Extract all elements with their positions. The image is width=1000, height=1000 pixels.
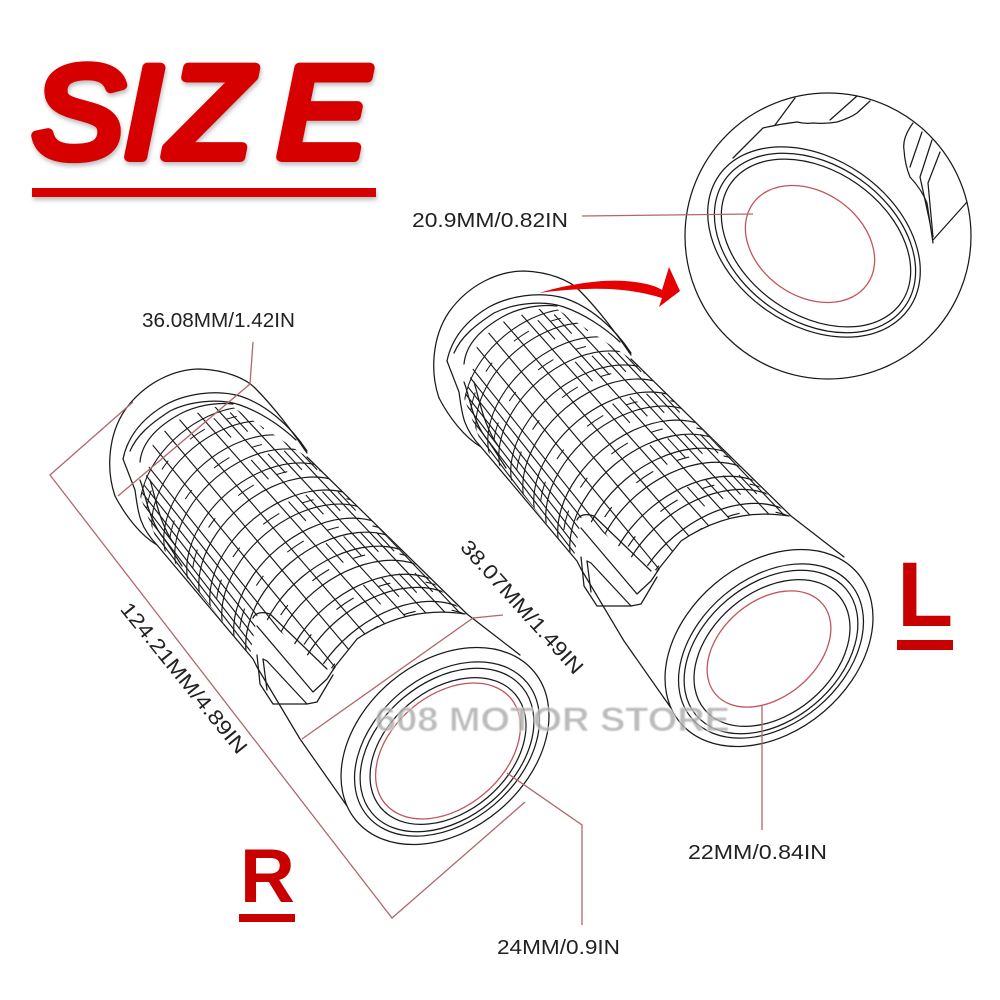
detail circle xyxy=(671,93,971,379)
detail rings xyxy=(671,96,967,377)
grip near end rings xyxy=(302,607,588,885)
label: 20.9MM: 20.9MM/0.82IN xyxy=(412,209,568,232)
leader: 20.9mm xyxy=(582,214,753,216)
right grip drawing xyxy=(108,369,588,885)
left grip drawing xyxy=(432,271,912,787)
grip far cap and outline xyxy=(110,369,520,806)
title: SIZE: SIZE xyxy=(33,40,370,185)
label: 24MM: 24MM/0.9IN xyxy=(497,936,620,959)
label: 22MM: 22MM/0.84IN xyxy=(688,841,827,864)
grip knurled grid xyxy=(108,369,505,789)
right grip bore (red) xyxy=(349,655,547,847)
red arrow xyxy=(539,267,680,307)
left grip bore (red) xyxy=(685,567,853,731)
dimension line: left grip bore xyxy=(761,705,763,830)
letter L with underline: L xyxy=(897,544,953,646)
letter R with underline: R xyxy=(240,834,295,919)
dimension lines: right grip xyxy=(50,342,582,925)
label: 124.21MM: 124.21MM/4.89IN xyxy=(116,598,252,759)
label: 38.07MM: 38.07MM/1.49IN xyxy=(456,536,588,679)
detail bore (red) xyxy=(723,161,897,327)
label: 36.08MM: 36.08MM/1.42IN xyxy=(142,309,295,332)
watermark: 608 MOTOR STORE xyxy=(375,701,730,739)
grip V notch xyxy=(253,612,465,704)
